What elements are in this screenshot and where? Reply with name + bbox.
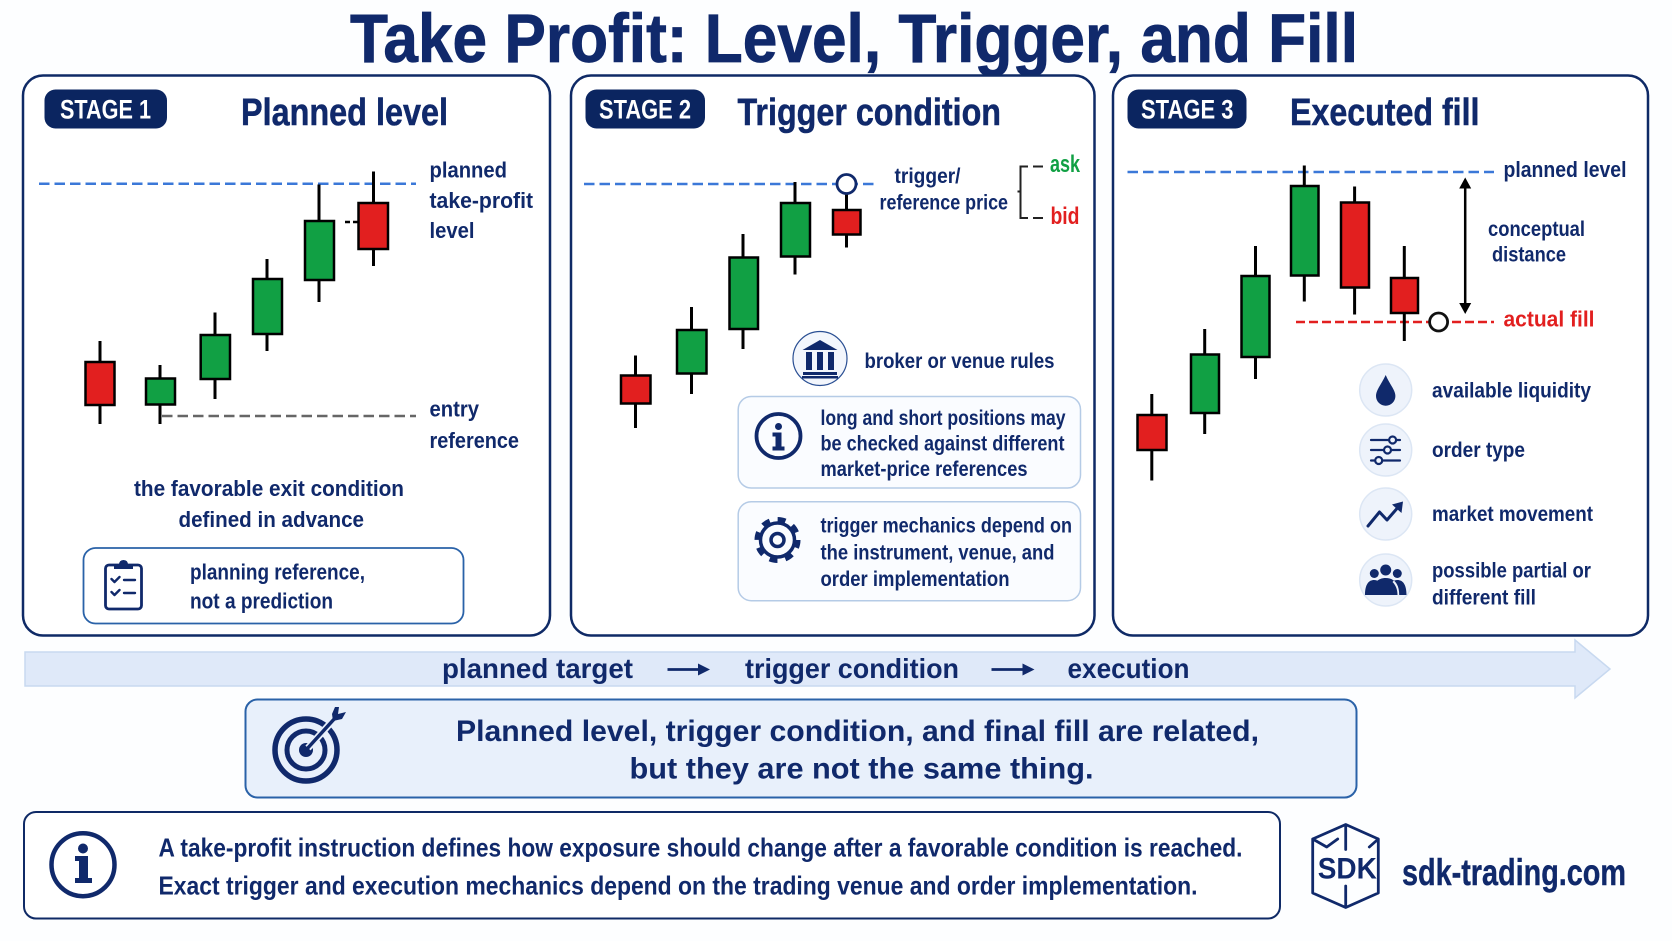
trigger dashed line (584, 183, 874, 185)
footnote panel: A take-profit instruction defines how exposure should change after a favorable condition is reached. (158, 833, 1242, 863)
actual fill dashed line (1296, 321, 1494, 323)
factor row: order type (1360, 424, 1525, 476)
label: planned level: planned level (1504, 157, 1626, 182)
factor row: possible partial or different fill: different fill (1432, 586, 1536, 610)
candlestick chart: stage 1 (86, 172, 388, 424)
icon: water drop (1360, 364, 1412, 416)
label: conceptual distance: distance (1492, 244, 1566, 266)
process arrow band: execution (1068, 653, 1190, 684)
entry reference dashed line (162, 415, 416, 417)
arrow: trigger to execution (992, 664, 1034, 676)
icon: info (52, 833, 114, 896)
factor row: possible partial or different fill: possible partial or (1432, 560, 1591, 582)
callout: planning reference: planning reference, (190, 560, 365, 585)
icon: rising chart (1360, 488, 1412, 540)
heading: executed fill: Executed fill (1290, 92, 1480, 134)
label: planned take-profit level: level (430, 218, 474, 243)
info box: long and short positions: long and short positions may (820, 407, 1066, 430)
stage 1 badge: STAGE 1 (60, 94, 151, 124)
title: Take Profit: Level, Trigger, and Fill (350, 0, 1358, 77)
trigger point marker (837, 174, 856, 194)
info box: long and short positions: market-price references (820, 458, 1028, 481)
description text (134, 476, 404, 532)
icon: sliders (1360, 424, 1412, 476)
panel: stage 2 trigger condition (571, 76, 1094, 636)
label: planned take-profit level (430, 158, 534, 243)
icon: gear (757, 520, 798, 560)
stage 3 badge: STAGE 3 (1141, 94, 1234, 124)
panel: stage 3 executed fill (1113, 76, 1648, 636)
info box: trigger mechanics (738, 502, 1080, 601)
stage 2 badge: STAGE 2 (599, 94, 691, 124)
info box: long and short positions: be checked against different (820, 432, 1064, 456)
broker or venue rules row (793, 332, 1054, 386)
icon: bank (793, 332, 847, 386)
candlestick chart: stage 2 (621, 182, 860, 428)
footnote panel (24, 812, 1280, 918)
label: trigger / reference price (880, 165, 1008, 214)
label: entry reference (430, 397, 519, 453)
stage 2 badge (586, 90, 705, 128)
label: bid: bid (1050, 203, 1080, 230)
logo: SDK hexagon: SDK (1318, 852, 1377, 886)
panel: stage 1 planned level (23, 76, 550, 636)
key message banner: Planned level, trigger condition, and final fill are related, (456, 715, 1259, 748)
factor row: available liquidity: available liquidity (1432, 380, 1591, 402)
info box: trigger mechanics: trigger mechanics depend on (820, 514, 1072, 538)
process arrow band (25, 640, 1610, 698)
label: planned take-profit level: take-profit (430, 188, 534, 213)
description text: the favorable exit condition (134, 476, 404, 501)
arrow: target to trigger (668, 664, 710, 676)
logo: SDK hexagon (1313, 824, 1378, 908)
label: entry reference: entry (430, 397, 480, 422)
label: conceptual distance: conceptual (1488, 218, 1585, 241)
icon: clipboard (106, 560, 142, 609)
stage 1 badge (44, 90, 167, 128)
planned take-profit dashed line (39, 182, 416, 185)
callout: planning reference (84, 548, 464, 624)
info box: long and short positions (738, 396, 1080, 488)
info box: trigger mechanics: the instrument, venue, and (820, 542, 1054, 564)
bracket: ask and bid (1018, 166, 1043, 218)
label: actual fill: actual fill (1504, 306, 1594, 332)
process arrow band: trigger condition (745, 653, 959, 684)
factor row: possible partial or different fill (1360, 554, 1591, 610)
factor row: available liquidity (1360, 364, 1591, 416)
candlestick chart: stage 3 (1138, 166, 1418, 480)
label: trigger / reference price: reference price (880, 192, 1008, 214)
info box: trigger mechanics: order implementation (820, 568, 1010, 591)
label: planned take-profit level: planned (430, 158, 507, 182)
label: ask: ask (1050, 151, 1080, 178)
icon: target with arrow (275, 707, 346, 781)
heading: trigger condition: Trigger condition (738, 92, 1001, 134)
process arrow band: planned target (442, 653, 633, 684)
factor row: order type: order type (1432, 439, 1525, 462)
label: trigger / reference price: trigger/ (894, 165, 961, 188)
icon: people (1360, 554, 1412, 606)
factor row: market movement (1360, 488, 1593, 540)
arrow: conceptual distance (1459, 178, 1471, 314)
heading: planned level: Planned level (241, 92, 448, 134)
label: conceptual distance (1488, 218, 1585, 266)
icon: info (756, 414, 800, 458)
key message banner (246, 700, 1356, 798)
footnote panel: Exact trigger and execution mechanics depend on the trading venue and order implementation. (158, 870, 1198, 900)
stage 3 badge (1128, 90, 1246, 128)
planned level dashed line (1128, 171, 1494, 173)
fill point marker (1430, 313, 1448, 331)
description text: defined in advance (178, 507, 364, 532)
callout: planning reference: not a prediction (190, 589, 333, 614)
label: entry reference: reference (430, 428, 519, 453)
broker or venue rules row: broker or venue rules (864, 350, 1054, 373)
key message banner: but they are not the same thing. (630, 752, 1094, 786)
factor row: market movement: market movement (1432, 503, 1593, 526)
